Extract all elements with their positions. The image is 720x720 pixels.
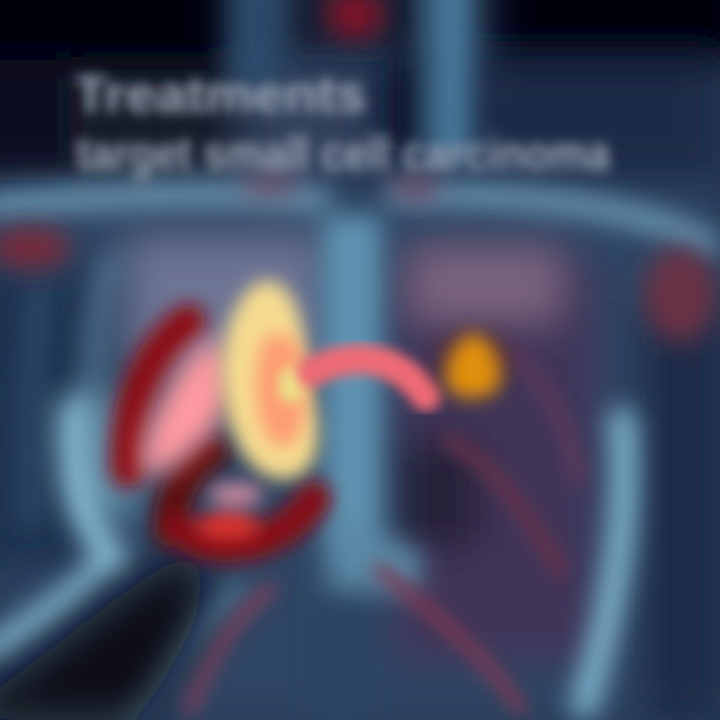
title line 1: Treatments bbox=[74, 66, 366, 124]
tumour: pink inner body bbox=[140, 335, 230, 474]
collar bones and rib highlights bbox=[0, 195, 710, 710]
tumour: dark red outer crescents bbox=[128, 322, 314, 546]
tumour: yellow highlight bbox=[278, 366, 304, 404]
icon: amber nodule bbox=[437, 330, 509, 402]
title line 2: target small cell carcinoma bbox=[76, 128, 610, 181]
title bbox=[74, 66, 610, 181]
central spine bbox=[315, 215, 425, 720]
tumour: orange centre bbox=[256, 334, 306, 448]
tumour: lower red glow bbox=[196, 483, 264, 540]
arrow: pink link to nodule bbox=[312, 359, 426, 396]
neck column bbox=[232, 0, 472, 160]
dark lower-left shadow bbox=[0, 550, 201, 720]
lower lung vessels bbox=[190, 350, 578, 708]
dark upper backdrop bbox=[0, 0, 720, 180]
tumour: left lung mass bbox=[128, 280, 318, 546]
chest panel bbox=[0, 195, 720, 720]
shoulder tints bbox=[0, 175, 716, 343]
tumour: yellow core bbox=[222, 280, 318, 480]
